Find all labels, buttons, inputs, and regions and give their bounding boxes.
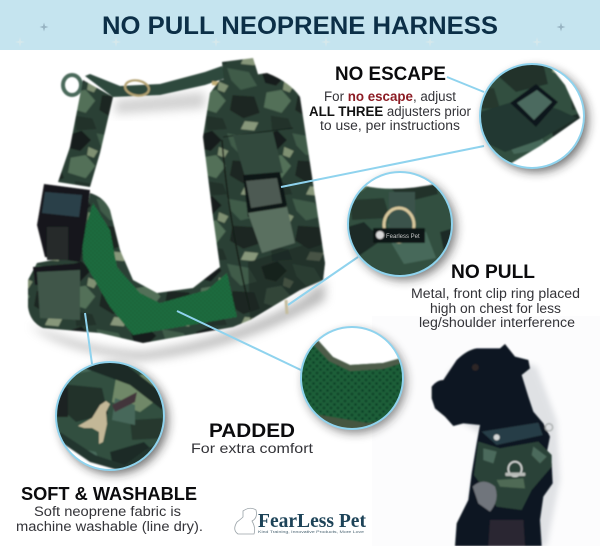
callout: no escape: NO ESCAPE — [335, 64, 446, 85]
callout: no escape — [309, 64, 471, 133]
callout: no pull: NO PULL — [451, 262, 535, 283]
callout: no pull: leg/shoulder interference — [419, 315, 575, 330]
detail circle: front ring: Fearless Pet — [386, 234, 420, 240]
paw — [473, 482, 497, 512]
mesh panel — [82, 203, 237, 335]
body — [28, 73, 325, 343]
harness shadow — [30, 280, 325, 360]
callout: padded: PADDED — [209, 421, 295, 442]
logo: FearLess Pet — [258, 510, 366, 532]
carry loop — [63, 75, 81, 95]
callout: padded — [191, 421, 313, 456]
callout: no escape: ALL THREE adjusters prior — [309, 104, 471, 119]
front ring — [508, 462, 522, 476]
small ring — [212, 83, 230, 85]
side tab — [37, 270, 80, 320]
d-ring — [124, 79, 150, 97]
title: NO PULL NEOPRENE HARNESS — [102, 12, 498, 40]
callout: soft and washable: Soft neoprene fabric is — [34, 504, 181, 519]
callout: no pull: high on chest for less — [430, 301, 561, 316]
callout lines — [85, 77, 484, 371]
adjuster strap — [233, 132, 283, 177]
cross band — [223, 113, 293, 137]
dog harness — [474, 442, 552, 510]
icon: puppy outline — [235, 508, 256, 534]
side buckle — [37, 184, 90, 262]
detail circle: neoprene fabric — [50, 360, 170, 474]
callout: soft and washable: SOFT & WASHABLE — [21, 484, 197, 504]
header band — [0, 0, 600, 50]
detail circle: front ring — [340, 172, 460, 285]
seam — [222, 140, 250, 310]
detail circle: adjuster — [475, 60, 588, 172]
adjuster tab — [248, 207, 295, 253]
logo: Kind Training, Innovative Products, More Love — [258, 530, 364, 534]
callout: no escape: For no escape, adjust — [324, 89, 456, 104]
callout: no escape: to use, per instructions — [320, 118, 460, 133]
callout: soft and washable: machine washable (line dry). — [16, 519, 203, 534]
callout: no pull: Metal, front clip ring placed — [411, 286, 580, 301]
dog silhouette — [432, 344, 553, 546]
collar — [482, 423, 543, 445]
adjuster buckle — [243, 172, 287, 217]
shoulder strap — [222, 58, 270, 117]
pin — [286, 300, 287, 314]
logo — [235, 508, 366, 534]
left strap — [58, 80, 113, 187]
callout: padded: For extra comfort — [191, 440, 313, 456]
dog shadow — [437, 353, 560, 546]
harness photo — [28, 58, 325, 360]
callout: no pull — [411, 262, 580, 330]
top strap — [85, 66, 226, 97]
dog photo — [432, 344, 560, 546]
callout: soft and washable — [16, 484, 203, 534]
detail circle: mesh — [300, 327, 406, 433]
paw print dog mark — [78, 401, 110, 444]
